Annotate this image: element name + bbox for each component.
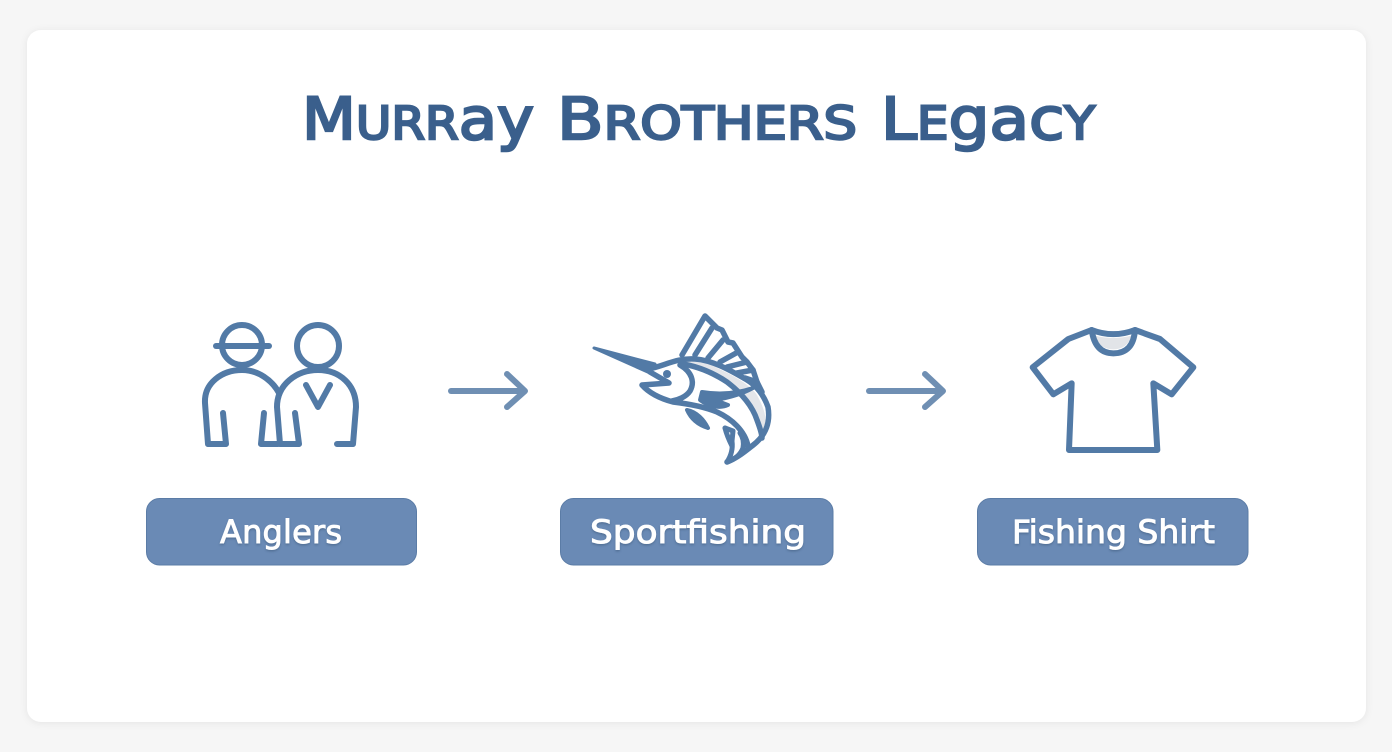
label: Anglers: Anglers: [220, 513, 342, 551]
label: Sportfishing: Sportfishing: [590, 513, 806, 551]
icon: fishing shirt: [1033, 330, 1193, 450]
arrow: sportfishing to shirt: [869, 374, 943, 407]
title: MURRay: [302, 85, 534, 153]
label: Fishing Shirt: Fishing Shirt: [1012, 513, 1215, 551]
title: LEgac Y: [881, 85, 1096, 153]
label: Fishing Shirt: [978, 498, 1248, 565]
title: BROTHERS: [557, 85, 857, 153]
title: [302, 85, 1096, 153]
label: Anglers: [146, 498, 416, 565]
icon: two anglers: [205, 325, 356, 444]
icon: leaping marlin: [594, 316, 769, 462]
arrow: anglers to sportfishing: [451, 374, 525, 407]
label: Sportfishing: [560, 498, 833, 565]
